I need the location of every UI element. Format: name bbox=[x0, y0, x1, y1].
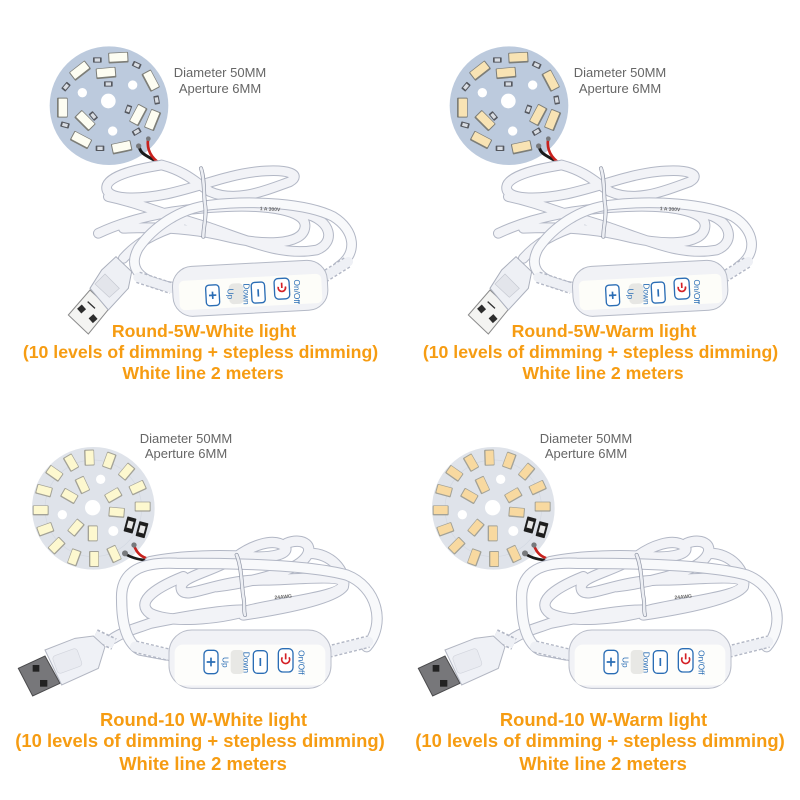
caption: dimensions bbox=[174, 65, 266, 96]
product photo: 10W warm bbox=[418, 447, 777, 696]
icon: coiled cable bbox=[498, 165, 752, 288]
product label bbox=[15, 709, 385, 774]
caption: dimensions: Aperture 6MM bbox=[179, 81, 261, 96]
product label: Round-10 W-Warm light bbox=[500, 709, 707, 730]
caption: dimensions bbox=[140, 431, 232, 461]
dimmer controller: On/Off bbox=[292, 279, 302, 305]
dimmer controller: Up bbox=[625, 289, 635, 300]
caption: dimensions: Diameter 50MM bbox=[174, 65, 266, 80]
icon: USB plug bbox=[468, 257, 532, 334]
caption: dimensions: Aperture 6MM bbox=[579, 81, 661, 96]
product label bbox=[415, 709, 785, 774]
caption: dimensions bbox=[574, 65, 666, 96]
cable print: 1 A 300V bbox=[260, 206, 281, 213]
cable print: 24AWG bbox=[274, 594, 292, 601]
product label: (10 levels of dimming + stepless dimming) bbox=[415, 730, 785, 751]
cable print: 24AWG bbox=[674, 594, 692, 601]
panel: Round 10W Warm light bbox=[415, 431, 785, 774]
icon: coiled cable bbox=[113, 541, 377, 655]
product photo: 10W white bbox=[18, 447, 377, 696]
panel: Round 5W White light bbox=[23, 46, 378, 383]
product label bbox=[423, 321, 778, 383]
product label: White line 2 meters bbox=[519, 753, 687, 774]
icon: LED disc bbox=[432, 447, 555, 570]
caption: dimensions: Diameter 50MM bbox=[574, 65, 666, 80]
product label: (10 levels of dimming + stepless dimming) bbox=[423, 342, 778, 362]
dimmer controller: On/Off bbox=[296, 650, 306, 675]
product label: White line 2 meters bbox=[522, 363, 684, 383]
caption: dimensions bbox=[540, 431, 632, 461]
caption: dimensions: Diameter 50MM bbox=[540, 431, 632, 446]
icon: USB plug bbox=[68, 257, 132, 334]
icon: LED disc bbox=[450, 46, 568, 165]
product label: Round-5W-White light bbox=[112, 321, 296, 341]
product label: Round-5W-Warm light bbox=[512, 321, 696, 341]
panel: Round 10W White light bbox=[15, 431, 385, 774]
dimmer controller bbox=[571, 259, 729, 317]
dimmer controller: Down bbox=[641, 283, 651, 305]
dimmer controller: Up bbox=[220, 657, 230, 668]
product label: (10 levels of dimming + stepless dimming) bbox=[15, 730, 385, 751]
icon: coiled cable bbox=[98, 165, 352, 288]
product label: Round-10 W-White light bbox=[100, 709, 307, 730]
caption: dimensions: Diameter 50MM bbox=[140, 431, 232, 446]
product label: White line 2 meters bbox=[122, 363, 284, 383]
panel: Round 5W Warm light bbox=[423, 46, 778, 383]
dimmer controller bbox=[169, 630, 331, 688]
dimmer controller bbox=[569, 630, 731, 688]
product label bbox=[23, 321, 378, 383]
product photo: 5W warm bbox=[450, 46, 752, 334]
icon: LED disc bbox=[50, 46, 168, 165]
icon: coiled cable bbox=[513, 541, 777, 655]
product label: (10 levels of dimming + stepless dimming) bbox=[23, 342, 378, 362]
dimmer controller: On/Off bbox=[696, 650, 706, 675]
icon: USB plug bbox=[418, 635, 514, 696]
icon: LED disc bbox=[32, 447, 155, 570]
dimmer controller: On/Off bbox=[692, 279, 702, 305]
caption: dimensions: Aperture 6MM bbox=[545, 446, 627, 461]
icon: USB plug bbox=[18, 635, 114, 696]
dimmer controller: Down bbox=[242, 652, 252, 673]
product label: White line 2 meters bbox=[119, 753, 287, 774]
dimmer controller: Down bbox=[642, 652, 652, 673]
product photo: 5W white bbox=[50, 46, 352, 334]
dimmer controller bbox=[171, 259, 329, 317]
dimmer controller: Down bbox=[241, 283, 251, 305]
caption: dimensions: Aperture 6MM bbox=[145, 446, 227, 461]
dimmer controller: Up bbox=[225, 289, 235, 300]
dimmer controller: Up bbox=[620, 657, 630, 668]
cable print: 1 A 300V bbox=[660, 206, 681, 213]
